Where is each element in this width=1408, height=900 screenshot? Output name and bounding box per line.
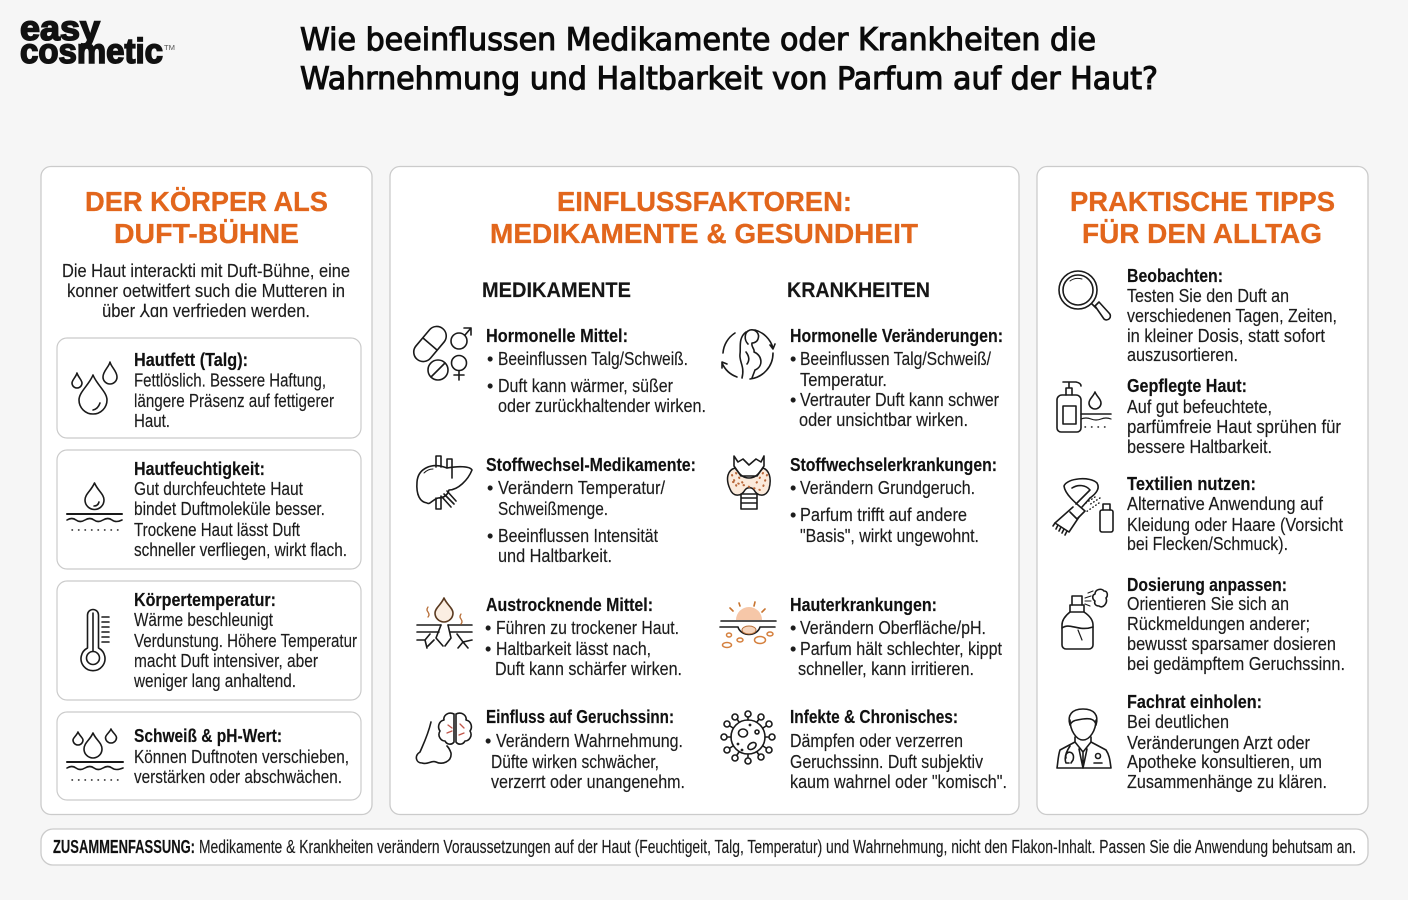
summary bar: ZUSAMMENFASSUNG: bbox=[53, 837, 195, 857]
text: Austrocknende Mittel bbox=[485, 595, 682, 679]
card: Hautfeuchtigkeit bbox=[57, 450, 361, 569]
text: Gepflegte Haut: Auf gut befeuchtete, bbox=[1127, 397, 1272, 417]
text: Textilien nutzen bbox=[1127, 474, 1343, 554]
icon: liver bbox=[417, 456, 472, 509]
text: Austrocknende Mittel: • bbox=[485, 639, 491, 659]
heading: Der Körper als Duft-Bühne bbox=[85, 186, 328, 249]
icon: nose and brain bbox=[416, 713, 471, 763]
item: Stoffwechsel-Medikamente bbox=[417, 455, 696, 566]
text: Hautfeuchtigkeit bbox=[134, 459, 347, 560]
text: Stoffwechsel-Medikamente: und Haltbarkeit. bbox=[498, 546, 612, 566]
text: Hormonelle Veränderungen: Hormonelle Veränderungen: bbox=[790, 326, 1003, 346]
title bbox=[300, 22, 1158, 97]
summary bar bbox=[41, 829, 1368, 865]
text: Stoffwechselerkrankungen bbox=[790, 455, 997, 546]
title: Wie beeinflussen Medikamente oder Krankheiten die bbox=[300, 22, 1096, 58]
item: Hormonelle Mittel bbox=[410, 323, 706, 416]
icon: virus bbox=[721, 711, 775, 764]
text: Beobachten: auszusortieren. bbox=[1127, 345, 1238, 365]
text: Hormonelle Mittel: • bbox=[487, 349, 493, 369]
text: Einfluss auf Geruchssinn: Verändern Wahrnehmung. bbox=[496, 731, 683, 751]
text: Hormonelle Mittel: oder zurückhaltender wirken. bbox=[498, 396, 706, 416]
icon: magnifier bbox=[1059, 271, 1110, 320]
text: Beobachten: Testen Sie den Duft an bbox=[1127, 286, 1289, 306]
icon: drop above cracked skin bbox=[417, 598, 472, 648]
text: Hauterkrankungen: • bbox=[790, 618, 796, 638]
title: Wahrnehmung und Haltbarkeit von Parfum auf der Haut? bbox=[300, 61, 1158, 97]
text: Hormonelle Veränderungen: Vertrauter Duft kann schwer bbox=[800, 390, 999, 410]
column heading: Krankheiten: KRANKHEITEN bbox=[787, 279, 930, 302]
text: Hormonelle Veränderungen: Beeinflussen Talg/Schweiß/ bbox=[800, 349, 991, 369]
text: Hauterkrankungen: Verändern Oberfläche/pH. bbox=[800, 618, 986, 638]
column heading: Medikamente: MEDIKAMENTE bbox=[482, 279, 631, 302]
icon: sweat drops on skin bbox=[67, 729, 123, 780]
text: Hormonelle Mittel: Beeinflussen Talg/Schweiß. bbox=[498, 349, 688, 369]
heading: Einflussfaktoren bbox=[490, 186, 918, 249]
panel: Praktische Tipps bbox=[1037, 166, 1368, 814]
intro text bbox=[62, 261, 350, 321]
text: Hauterkrankungen: • bbox=[790, 639, 796, 659]
icon: three drops bbox=[72, 362, 117, 414]
text: Infekte und Chronisches: Infekte & Chronisches: bbox=[790, 707, 958, 727]
text: Textilien nutzen: Kleidung oder Haare (Vorsicht bbox=[1127, 515, 1343, 535]
heading: Der Körper als Duft-Bühne: DER KÖRPER ALS bbox=[85, 186, 328, 217]
text: Stoffwechsel-Medikamente: • bbox=[487, 526, 493, 546]
text: Hormonelle Veränderungen bbox=[790, 326, 1003, 430]
text: Beobachten: in kleiner Dosis, statt sofort bbox=[1127, 326, 1325, 346]
tip: Dosierung anpassen bbox=[1062, 575, 1345, 674]
text: Gepflegte Haut: bessere Haltbarkeit. bbox=[1127, 437, 1272, 457]
text: Infekte und Chronisches: kaum wahrnel oder "komisch". bbox=[790, 772, 1007, 792]
text: Hormonelle Veränderungen: oder unsichtbar wirken. bbox=[799, 410, 968, 430]
item: Stoffwechselerkrankungen bbox=[728, 455, 997, 546]
logo: easy cosmetic: TM bbox=[164, 45, 175, 52]
text: Stoffwechsel-Medikamente: Schweißmenge. bbox=[498, 499, 608, 519]
text: Einfluss auf Geruchssinn bbox=[485, 707, 685, 792]
icon: thermometer bbox=[81, 610, 109, 671]
text: Gepflegte Haut: Gepflegte Haut: bbox=[1127, 376, 1247, 396]
text: Stoffwechselerkrankungen: Stoffwechselerkrankungen: bbox=[790, 455, 997, 475]
text: Gepflegte Haut: parfümfreie Haut sprühen für bbox=[1127, 417, 1341, 437]
text: Hauterkrankungen: Parfum hält schlechter, kippt bbox=[800, 639, 1002, 659]
text: Hauterkrankungen: schneller, kann irritieren. bbox=[798, 659, 974, 679]
tip: Beobachten bbox=[1059, 266, 1337, 365]
text: Dosierung anpassen: Dosierung anpassen: bbox=[1127, 575, 1287, 595]
text: Hautfeuchtigkeit: Gut durchfeuchtete Haut bbox=[134, 479, 303, 499]
text: Hautfett: Fettlöslich. Bessere Haftung, bbox=[134, 370, 326, 390]
text: Fachrat einholen: Apotheke konsultieren, um bbox=[1127, 752, 1322, 772]
logo: easy cosmetic: cosmetic bbox=[20, 32, 163, 71]
card: Hautfett bbox=[57, 338, 361, 438]
text: Körpertemperatur bbox=[133, 590, 357, 691]
text: Schweiß und pH-Wert: verstärken oder abschwächen. bbox=[134, 767, 342, 787]
item: Einfluss auf Geruchssinn bbox=[416, 707, 685, 792]
text: Körpertemperatur: weniger lang anhaltend. bbox=[133, 671, 296, 691]
tip: Fachrat einholen bbox=[1057, 692, 1327, 792]
text: Austrocknende Mittel: Führen zu trockener Haut. bbox=[496, 618, 679, 638]
text: Hormonelle Veränderungen: • bbox=[790, 390, 796, 410]
text: Hautfett: Hautfett (Talg): bbox=[134, 350, 248, 370]
text: Einfluss auf Geruchssinn: verzerrt oder unangenehm. bbox=[491, 772, 685, 792]
text: Hauterkrankungen: Hauterkrankungen: bbox=[790, 595, 937, 615]
panel: Einflussfaktoren bbox=[390, 166, 1019, 814]
icon: pills and gender symbols bbox=[410, 323, 471, 380]
icon: thyroid bbox=[728, 456, 770, 509]
heading: Praktische Tipps: PRAKTISCHE TIPPS bbox=[1070, 186, 1335, 217]
text: Hautfett bbox=[134, 350, 334, 431]
tip: Textilien nutzen bbox=[1053, 474, 1343, 554]
intro text: konner oetwitfert such die Mutteren in bbox=[67, 281, 345, 301]
text: Textilien nutzen: Alternative Anwendung auf bbox=[1127, 494, 1324, 514]
text: Beobachten bbox=[1127, 266, 1337, 365]
text: Einfluss auf Geruchssinn: • bbox=[485, 731, 491, 751]
text: Einfluss auf Geruchssinn: Einfluss auf Geruchssinn: bbox=[486, 707, 674, 727]
logo: easy cosmetic bbox=[20, 9, 175, 71]
text: Stoffwechsel-Medikamente bbox=[486, 455, 696, 566]
text: Hormonelle Mittel bbox=[486, 326, 706, 416]
text: Schweiß und pH-Wert bbox=[134, 726, 349, 787]
icon: perfume bottle with spray bbox=[1062, 589, 1107, 649]
heading: Praktische Tipps bbox=[1070, 186, 1335, 249]
text: Stoffwechsel-Medikamente: Verändern Temperatur/ bbox=[498, 478, 665, 498]
text: Fachrat einholen bbox=[1127, 692, 1327, 792]
icon: drop on skin bbox=[67, 483, 122, 530]
text: Fachrat einholen: Veränderungen Arzt oder bbox=[1127, 733, 1310, 753]
text: Textilien nutzen: Textilien nutzen: bbox=[1127, 474, 1256, 494]
text: Hautfeuchtigkeit: schneller verfliegen, wirkt flach. bbox=[134, 540, 347, 560]
text: Hauterkrankungen bbox=[790, 595, 1002, 679]
text: Austrocknende Mittel: Haltbarkeit lässt nach, bbox=[496, 639, 651, 659]
text: Stoffwechselerkrankungen: "Basis", wirkt ungewohnt. bbox=[800, 526, 979, 546]
text: Hautfett: Haut. bbox=[134, 411, 170, 431]
text: Stoffwechsel-Medikamente: Stoffwechsel-Medikamente: bbox=[486, 455, 696, 475]
text: Stoffwechsel-Medikamente: • bbox=[487, 478, 493, 498]
text: Körpertemperatur: macht Duft intensiver, aber bbox=[134, 651, 318, 671]
text: Hormonelle Mittel: Duft kann wärmer, süßer bbox=[498, 376, 673, 396]
heading: Praktische Tipps: FÜR DEN ALLTAG bbox=[1082, 218, 1322, 249]
text: Einfluss auf Geruchssinn: Düfte wirken schwächer, bbox=[491, 752, 659, 772]
text: Dosierung anpassen: bewusst sparsamer dosieren bbox=[1127, 634, 1336, 654]
text: Körpertemperatur: Verdunstung. Höhere Temperatur bbox=[134, 631, 357, 651]
text: Textilien nutzen: bei Flecken/Schmuck). bbox=[1127, 534, 1288, 554]
text: Austrocknende Mittel: • bbox=[485, 618, 491, 638]
text: Beobachten: Beobachten: bbox=[1127, 266, 1223, 286]
text: Infekte und Chronisches bbox=[790, 707, 1007, 792]
icon: inflamed skin with sun bbox=[720, 602, 776, 648]
icon: doctor bbox=[1057, 709, 1111, 768]
intro text: Die Haut interackti mit Duft-Bühne, eine bbox=[62, 261, 350, 281]
text: Fachrat einholen: Fachrat einholen: bbox=[1127, 692, 1262, 712]
text: Schweiß und pH-Wert: Können Duftnoten verschieben, bbox=[134, 747, 349, 767]
text: Stoffwechselerkrankungen: • bbox=[790, 478, 796, 498]
text: Hautfett: längere Präsenz auf fettigerer bbox=[134, 391, 334, 411]
item: Hauterkrankungen bbox=[720, 595, 1002, 679]
panel: Der Körper als Duft-Bühne bbox=[41, 166, 372, 814]
text: Hormonelle Mittel: Hormonelle Mittel: bbox=[486, 326, 628, 346]
text: Infekte und Chronisches: Geruchssinn. Duft subjektiv bbox=[790, 752, 983, 772]
heading: Der Körper als Duft-Bühne: DUFT-BÜHNE bbox=[114, 218, 299, 249]
icon: lotion bottle and drop bbox=[1057, 382, 1111, 432]
tip: Gepflegte Haut bbox=[1057, 376, 1341, 457]
icon: pregnant silhouette in cycle bbox=[722, 330, 775, 379]
heading: Einflussfaktoren: MEDIKAMENTE & GESUNDHEIT bbox=[490, 218, 918, 249]
text: Stoffwechsel-Medikamente: Beeinflussen Intensität bbox=[498, 526, 658, 546]
card: Schweiß und pH-Wert bbox=[57, 712, 361, 800]
item: Hormonelle Veränderungen bbox=[722, 326, 1003, 430]
text: Schweiß und pH-Wert: Schweiß & pH-Wert: bbox=[134, 726, 282, 746]
heading: Einflussfaktoren: EINFLUSSFAKTOREN: bbox=[557, 186, 852, 217]
logo: easy cosmetic: easy bbox=[20, 9, 101, 48]
text: Austrocknende Mittel: Austrocknende Mittel: bbox=[486, 595, 653, 615]
text: Infekte und Chronisches: Dämpfen oder verzerren bbox=[790, 731, 963, 751]
item: Austrocknende Mittel bbox=[417, 595, 682, 679]
text: Fachrat einholen: Bei deutlichen bbox=[1127, 712, 1229, 732]
text: Gepflegte Haut bbox=[1127, 376, 1341, 457]
text: Hautfeuchtigkeit: bindet Duftmoleküle besser. bbox=[134, 499, 325, 519]
text: Körpertemperatur: Wärme beschleunigt bbox=[134, 610, 273, 630]
card: Körpertemperatur bbox=[57, 581, 361, 700]
text: Fachrat einholen: Zusammenhänge zu klären. bbox=[1127, 772, 1327, 792]
text: Hormonelle Veränderungen: • bbox=[790, 349, 796, 369]
text: Körpertemperatur: Körpertemperatur: bbox=[134, 590, 276, 610]
text: Austrocknende Mittel: Duft kann schärfer wirken. bbox=[495, 659, 682, 679]
text: Dosierung anpassen: Orientieren Sie sich an bbox=[1127, 594, 1289, 614]
text: Hautfeuchtigkeit: Trockene Haut lässt Duft bbox=[134, 520, 300, 540]
text: Stoffwechselerkrankungen: Parfum trifft auf andere bbox=[800, 505, 967, 525]
text: Hormonelle Mittel: • bbox=[487, 376, 493, 396]
icon: scarf and spray bbox=[1053, 479, 1113, 535]
item: Infekte und Chronisches bbox=[721, 707, 1007, 792]
text: Dosierung anpassen bbox=[1127, 575, 1345, 674]
text: Dosierung anpassen: Rückmeldungen anderer; bbox=[1127, 614, 1310, 634]
text: Stoffwechselerkrankungen: Verändern Grundgeruch. bbox=[800, 478, 975, 498]
text: Stoffwechselerkrankungen: • bbox=[790, 505, 796, 525]
text: Beobachten: verschiedenen Tagen, Zeiten, bbox=[1127, 306, 1337, 326]
text: Dosierung anpassen: bei gedämpftem Geruchssinn. bbox=[1127, 654, 1345, 674]
intro text: über ⅄ɑn verfrieden werden. bbox=[102, 301, 310, 321]
text: Hormonelle Veränderungen: Temperatur. bbox=[800, 370, 887, 390]
text: Hautfeuchtigkeit: Hautfeuchtigkeit: bbox=[134, 459, 265, 479]
